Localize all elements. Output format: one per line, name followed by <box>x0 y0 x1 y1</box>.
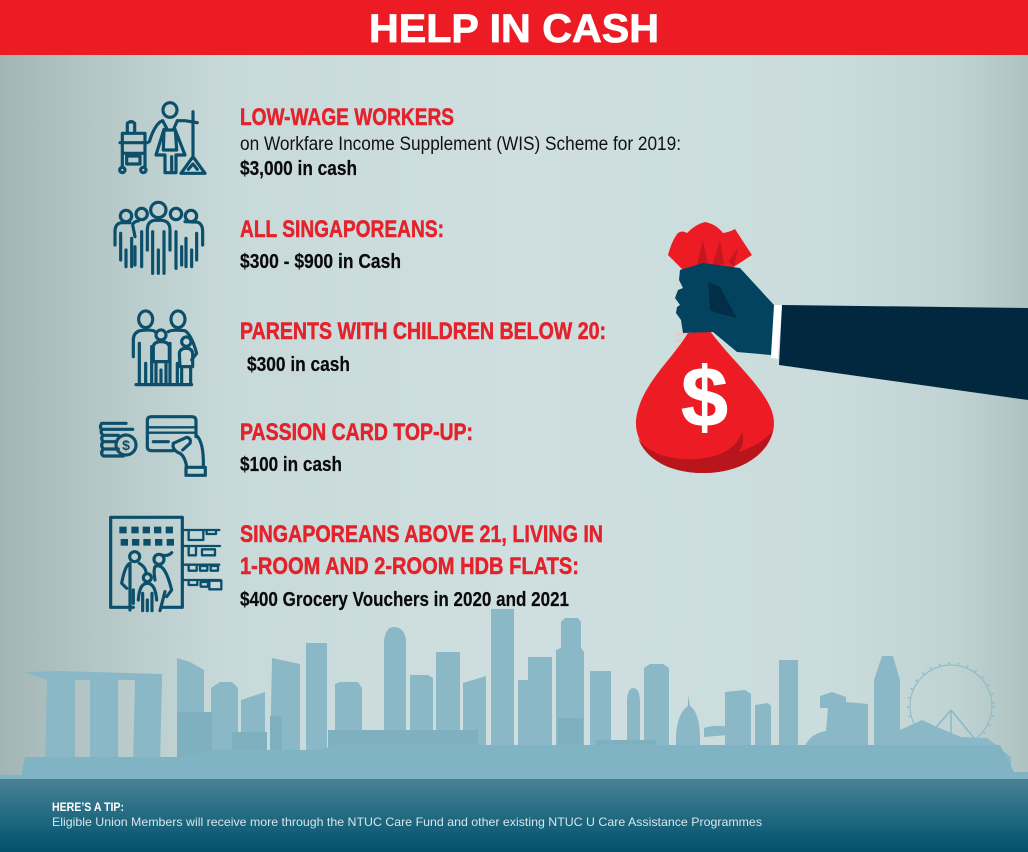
amount: $100 in cash <box>240 454 342 476</box>
cuff <box>771 305 782 359</box>
item: parents with children <box>133 311 606 385</box>
lower buildings layer <box>177 712 785 760</box>
amount: $3,000 in cash <box>240 158 357 180</box>
item: passion card top-up <box>100 417 473 476</box>
tip heading: HERE’S A TIP: <box>52 800 124 814</box>
hand <box>675 263 774 355</box>
skyline <box>0 609 1028 779</box>
item: low-wage workers <box>120 103 681 180</box>
heading: ALL SINGAPOREANS: <box>240 216 444 243</box>
heading: PARENTS WITH CHILDREN BELOW 20: <box>240 318 606 345</box>
amount: $300 - $900 in Cash <box>240 251 401 273</box>
bag ruffle <box>668 222 752 270</box>
illustration: hand holding money bag <box>636 222 1028 473</box>
title banner <box>0 0 1028 55</box>
tie cord <box>675 333 690 347</box>
icon: family <box>133 311 197 385</box>
amount: $300 in cash <box>247 354 350 376</box>
tip text: Eligible Union Members will receive more through the NTUC Care Fund and other existing NTUC U Care Assistance Programmes <box>52 815 762 829</box>
heading: SINGAPOREANS ABOVE 21, LIVING IN <box>240 521 603 548</box>
title banner: HELP IN CASH <box>369 7 659 51</box>
icon: crowd of people <box>115 202 203 273</box>
tip band <box>0 779 1028 852</box>
description: on Workfare Income Supplement (WIS) Scheme for 2019: <box>240 134 681 155</box>
heading: LOW-WAGE WORKERS <box>240 104 454 131</box>
icon: coins, card and hand: $ <box>122 437 130 453</box>
sleeve <box>779 305 1028 400</box>
dollar sign: $ <box>681 350 728 444</box>
heading line two: 1-ROOM AND 2-ROOM HDB FLATS: <box>240 553 579 580</box>
icon: cleaner with cart and broom <box>120 103 205 173</box>
amount: $400 Grocery Vouchers in 2020 and 2021 <box>240 589 569 611</box>
ferris wheel <box>908 663 994 750</box>
icon: flat block with family <box>111 517 221 611</box>
bag body <box>636 331 774 473</box>
icon: coins, card and hand <box>100 417 205 475</box>
heading: PASSION CARD TOP-UP: <box>240 419 473 446</box>
item: all Singaporeans <box>115 202 444 273</box>
bag shadow <box>638 430 773 473</box>
item: HDB flats <box>111 517 603 611</box>
